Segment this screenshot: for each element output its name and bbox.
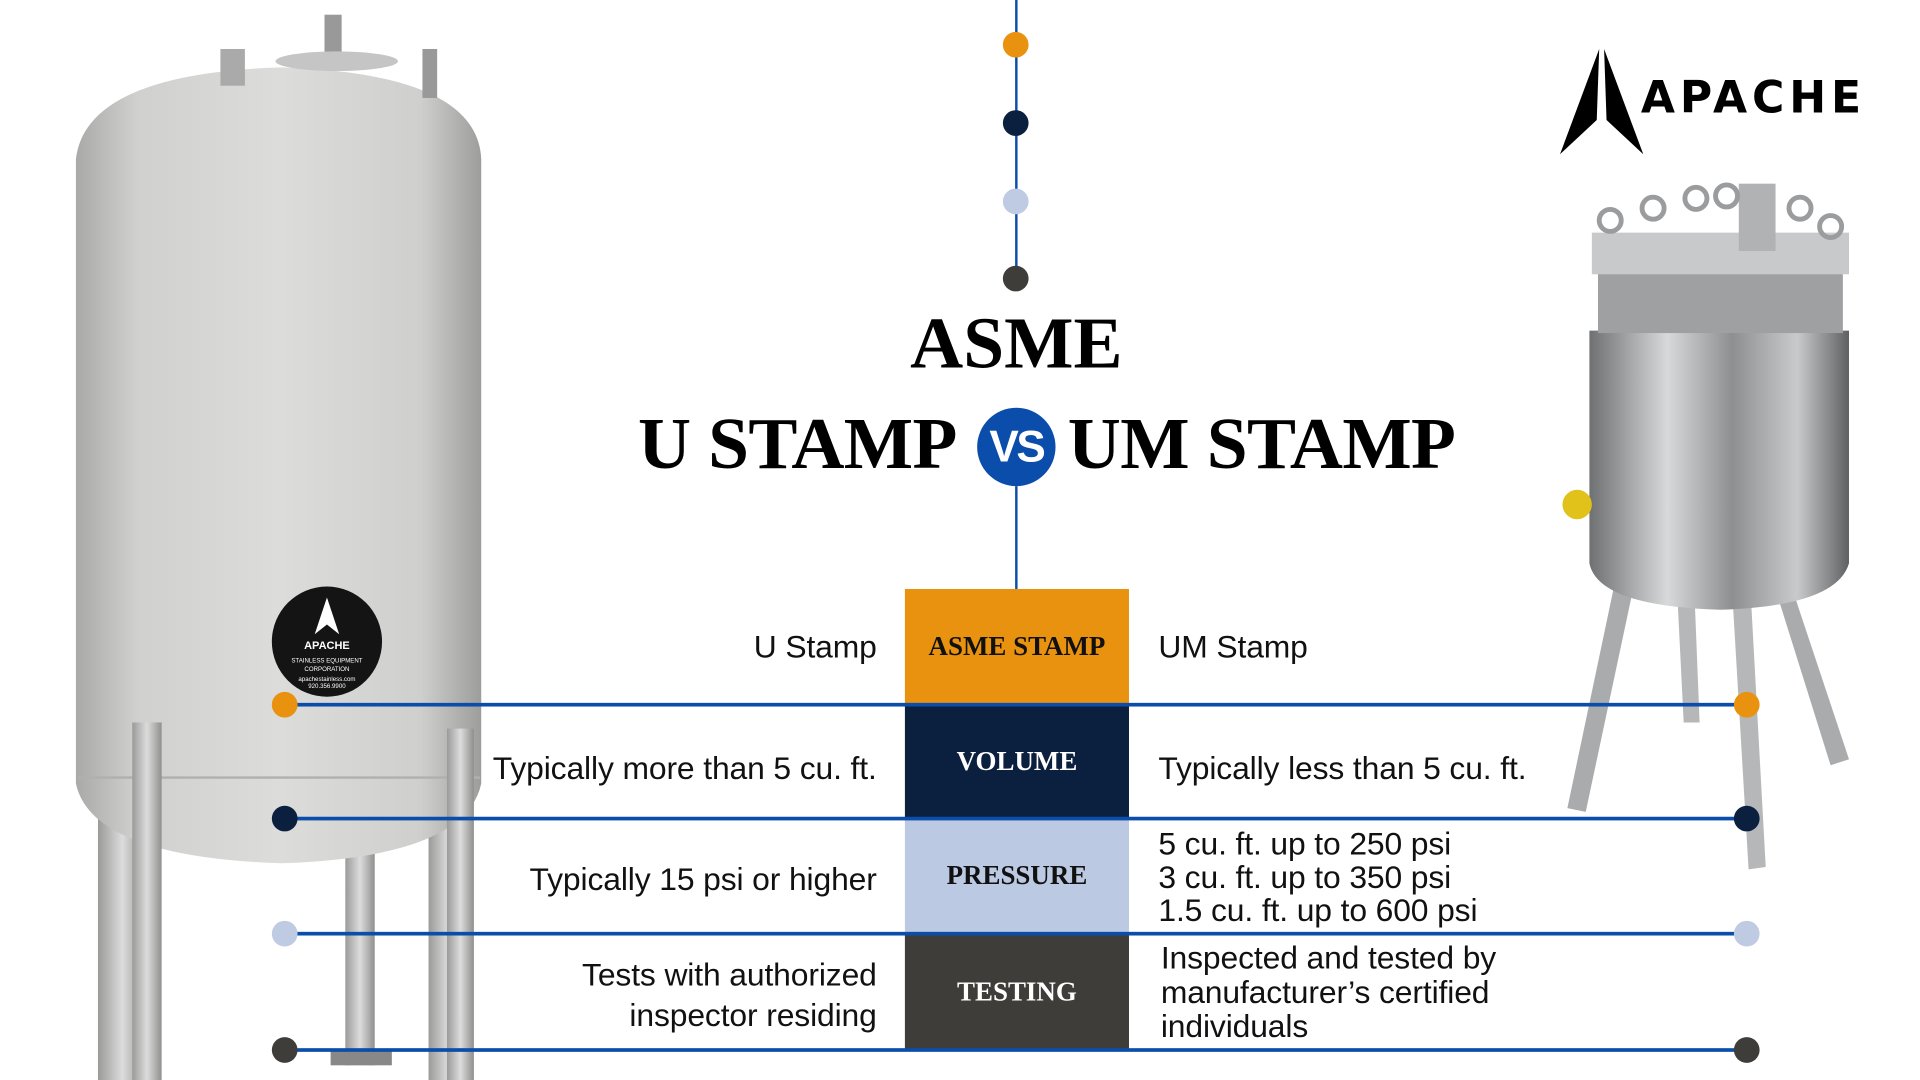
text: Inspected and tested by	[1161, 939, 1496, 976]
header row	[905, 589, 1129, 704]
icon: apache badge: STAINLESS EQUIPMENT	[291, 657, 363, 664]
text: Typically more than 5 cu. ft.	[493, 749, 877, 786]
volume row label: VOLUME	[957, 745, 1077, 776]
text: Tests with authorized	[582, 956, 877, 993]
left column texts: U Stamp	[754, 628, 877, 665]
pressure row label: PRESSURE	[947, 860, 1087, 890]
testing row label	[905, 933, 1129, 1049]
text: Typically less than 5 cu. ft.	[1158, 749, 1526, 786]
pressure row label	[905, 818, 1129, 933]
icon: apache badge	[272, 587, 382, 697]
row dividers with end dots	[272, 692, 1760, 1063]
text: 1.5 cu. ft. up to 600 psi	[1158, 891, 1477, 928]
title: UM STAMP	[1068, 403, 1455, 484]
title	[638, 302, 1455, 486]
logo: Apache	[1560, 49, 1866, 154]
title: ASME	[910, 302, 1122, 383]
header row: ASME STAMP	[929, 631, 1105, 661]
icon: apache badge: CORPORATION	[304, 666, 349, 673]
right column texts: UM Stamp	[1158, 628, 1308, 665]
icon: vs badge: VS	[989, 421, 1043, 471]
left tank illustration	[76, 14, 482, 1080]
icon: apache badge: apachestainless.com	[298, 676, 355, 683]
icon: apache badge: APACHE	[304, 640, 350, 652]
text: inspector residing	[629, 997, 877, 1033]
top timeline with dots	[1002, 0, 1029, 292]
connector line	[1015, 486, 1018, 589]
text: 5 cu. ft. up to 250 psi	[1158, 825, 1451, 862]
text: manufacturer’s certified	[1161, 973, 1489, 1010]
text: individuals	[1161, 1008, 1308, 1044]
right tank illustration	[1562, 182, 1849, 870]
testing row label: TESTING	[957, 975, 1077, 1006]
text: 3 cu. ft. up to 350 psi	[1158, 858, 1451, 895]
icon: vs badge	[977, 408, 1056, 486]
icon: apache badge: 920.356.9900	[308, 683, 346, 690]
logo: Apache: APACHE	[1641, 73, 1866, 124]
volume row label	[905, 704, 1129, 818]
text: Typically 15 psi or higher	[530, 861, 877, 898]
title: U STAMP	[638, 403, 957, 484]
